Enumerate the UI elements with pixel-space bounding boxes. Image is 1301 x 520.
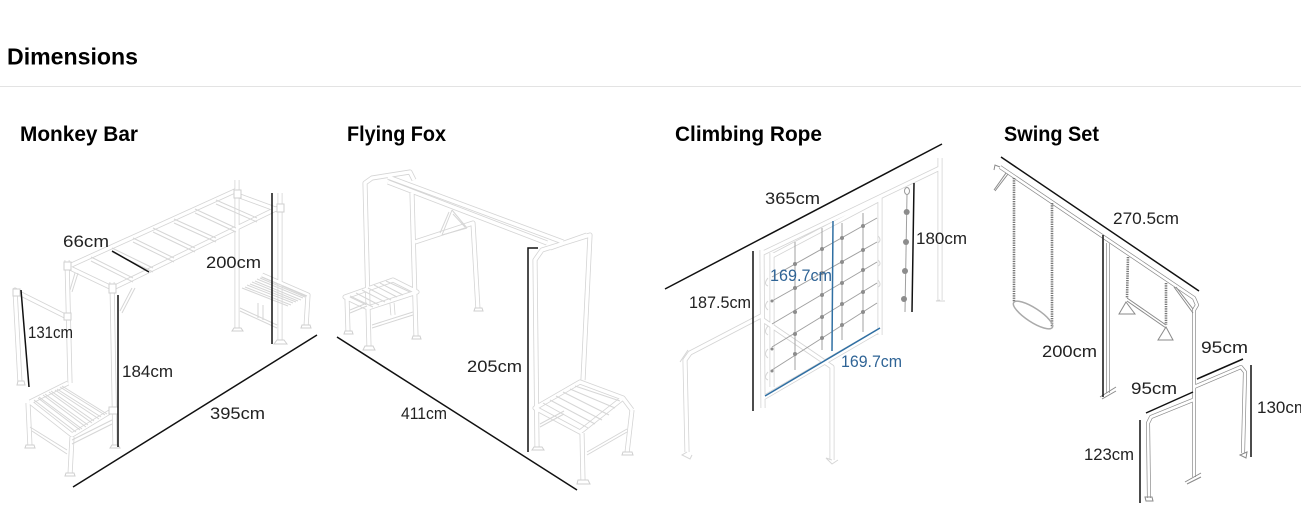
label 180cm: 180cm <box>916 229 967 248</box>
label 187.5cm: 187.5cm <box>689 293 751 312</box>
climbing net <box>770 213 877 372</box>
label 205cm: 205cm <box>467 357 522 376</box>
label 131cm: 131cm <box>28 323 73 342</box>
label 169.7cm width: 169.7cm <box>841 352 902 371</box>
label 95cm upper: 95cm <box>1201 338 1248 357</box>
panel: swing set <box>994 123 1301 503</box>
label 200cm: 200cm <box>1042 342 1097 361</box>
dimension lines: flying fox <box>337 248 577 490</box>
dimension lines: monkey bar <box>21 193 317 487</box>
swing set frame drawing <box>994 165 1247 501</box>
label 169.7cm height: 169.7cm <box>770 266 832 285</box>
climbing rope frame drawing <box>680 158 945 464</box>
panel: climbing rope <box>665 123 967 464</box>
label 123cm: 123cm <box>1084 445 1134 464</box>
swing with seat <box>1010 178 1056 333</box>
heading: flying fox: Flying Fox <box>347 123 446 146</box>
heading: swing set: Swing Set <box>1004 123 1099 146</box>
label 365cm: 365cm <box>765 189 820 208</box>
label 200cm: 200cm <box>206 253 261 272</box>
heading: monkey bar: Monkey Bar <box>20 123 138 146</box>
trapeze bar with handles <box>1119 257 1173 340</box>
blue dimension lines <box>765 221 880 396</box>
label 95cm lower: 95cm <box>1131 379 1177 398</box>
label 270.5cm: 270.5cm <box>1113 209 1179 228</box>
label 184cm: 184cm <box>122 362 173 381</box>
panel: monkey bar <box>13 123 317 487</box>
label 395cm: 395cm <box>210 404 265 423</box>
hanging knotted rope <box>901 188 910 312</box>
label 66cm: 66cm <box>63 232 109 251</box>
title: Dimensions <box>7 44 138 70</box>
heading: climbing rope: Climbing Rope <box>675 123 822 146</box>
monkey bar frame drawing <box>13 180 311 476</box>
label 411cm: 411cm <box>401 404 447 423</box>
dimension lines: climbing rope <box>665 144 942 411</box>
dimension lines: swing set <box>1001 157 1251 503</box>
panel: flying fox <box>337 123 633 490</box>
flying fox frame drawing <box>344 172 633 484</box>
